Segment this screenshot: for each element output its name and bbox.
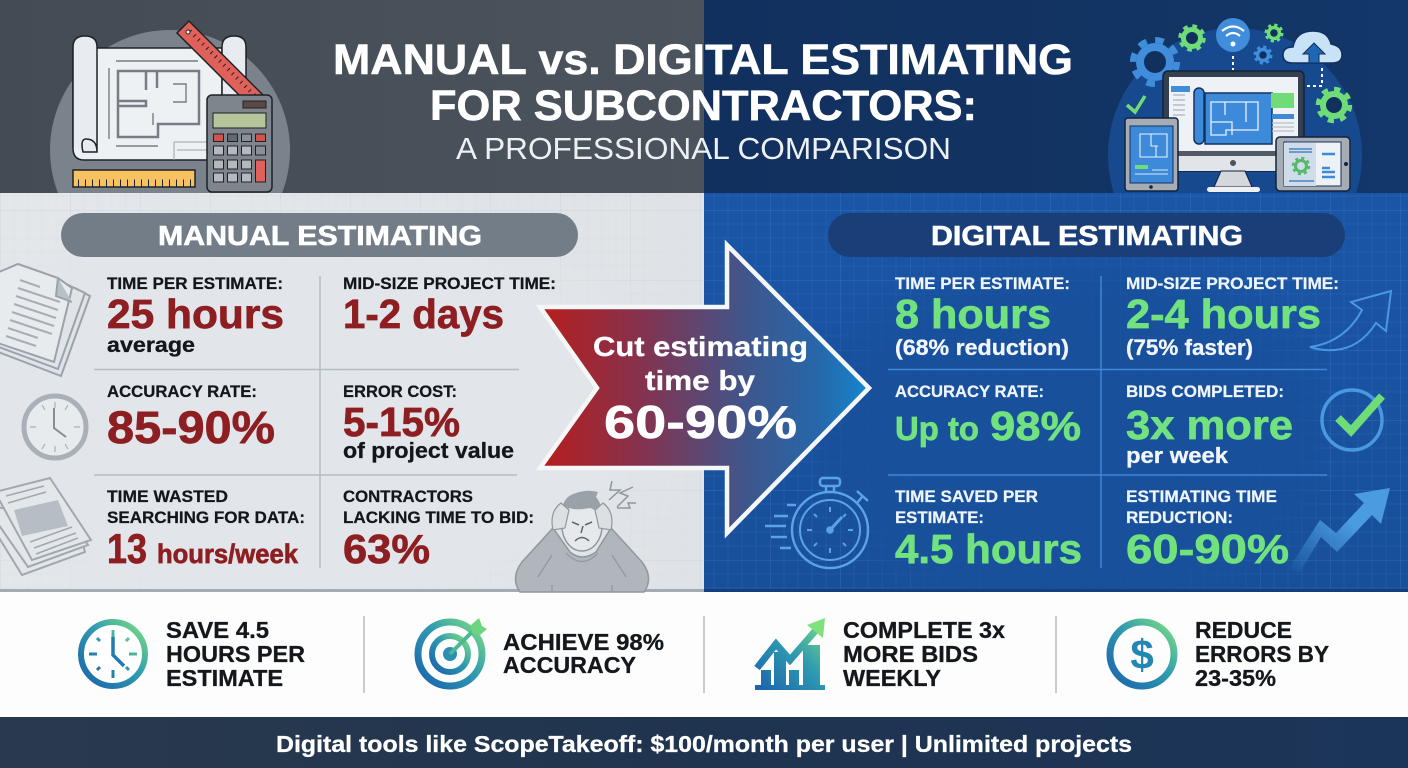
stat: time wasted searching (manual): TIME WASTED	[107, 487, 228, 506]
stat: accuracy rate (manual)	[107, 382, 275, 453]
benefit: save 4.5 hours: SAVE 4.5	[166, 617, 269, 643]
icon: blueprint, ruler and calculator	[50, 20, 290, 193]
central arrow callout	[540, 245, 869, 533]
icon: digital devices with gears and cloud	[1108, 18, 1362, 193]
stat: time wasted searching (manual): 13	[107, 525, 147, 572]
digital grid dividers	[888, 276, 1327, 568]
title: A PROFESSIONAL COMPARISON	[456, 131, 951, 166]
stat: accuracy rate (manual): ACCURACY RATE:	[107, 382, 257, 401]
stat: error cost (manual): ERROR COST:	[343, 382, 457, 401]
benefit: complete 3x more bids	[755, 617, 1005, 691]
central arrow callout: Cut estimating	[593, 331, 808, 362]
stat: estimating time reduction (digital): 60-90%	[1126, 526, 1289, 572]
stat: accuracy rate (digital)	[895, 382, 1081, 449]
benefits strip background	[0, 592, 1408, 717]
benefit: complete 3x more bids: COMPLETE 3x	[843, 617, 1005, 643]
icon: stacked paper	[0, 264, 90, 376]
benefit: save 4.5 hours	[81, 617, 305, 691]
title: MANUAL vs. DIGITAL ESTIMATING	[333, 36, 1073, 84]
stat: error cost (manual): 5-15%	[343, 399, 460, 445]
icon: check in circle	[1322, 390, 1382, 450]
stat: contractors lacking time (manual): LACKING TIME TO BID:	[343, 508, 534, 527]
stat: mid-size project time (digital): MID-SIZE PROJECT TIME:	[1126, 274, 1339, 293]
central arrow callout: 60-90%	[604, 396, 797, 448]
benefit: reduce errors: 23-35%	[1195, 665, 1276, 691]
benefit: achieve 98% accuracy: ACHIEVE 98%	[503, 629, 664, 655]
stat: mid-size project time (digital): (75% faster)	[1126, 335, 1253, 360]
benefit: reduce errors	[1110, 617, 1329, 691]
icon: target	[418, 618, 487, 686]
stat: bids completed (digital): 3x more	[1126, 402, 1293, 448]
stat: error cost (manual): of project value	[343, 438, 514, 463]
stat: time per estimate (manual): TIME PER ESTIMATE:	[107, 274, 283, 293]
benefit: complete 3x more bids: MORE BIDS	[843, 641, 978, 667]
stat: accuracy rate (digital): 98%	[990, 403, 1081, 449]
heading: manual estimating	[61, 213, 578, 257]
icon: clock	[81, 622, 145, 686]
stat: bids completed (digital)	[1126, 382, 1293, 468]
panel: digital estimating background	[704, 193, 1408, 592]
stat: time per estimate (digital)	[895, 274, 1070, 360]
stat: error cost (manual)	[343, 382, 514, 463]
stat: mid-size project time (manual): MID-SIZE PROJECT TIME:	[343, 274, 556, 293]
stat: bids completed (digital): per week	[1126, 443, 1229, 468]
stat: time per estimate (digital): (68% reduction)	[895, 335, 1069, 360]
benefit: save 4.5 hours: HOURS PER	[166, 641, 305, 667]
icon: stacked documents	[0, 478, 91, 575]
footer bar: Digital tools like ScopeTakeoff: $100/month per user | Unlimited projects	[276, 731, 1132, 757]
stat: contractors lacking time (manual): CONTRACTORS	[343, 487, 473, 506]
benefit: reduce errors: ERRORS BY	[1195, 641, 1329, 667]
icon: dollar ring	[1110, 622, 1174, 686]
icon: trending arrow	[1288, 488, 1390, 572]
icon: wall clock	[24, 396, 86, 458]
stat: bids completed (digital): BIDS COMPLETED:	[1126, 382, 1284, 401]
icon: stressed man	[515, 481, 649, 592]
stat: time saved per estimate (digital)	[895, 487, 1082, 572]
benefit: achieve 98% accuracy: ACCURACY	[503, 652, 636, 678]
central arrow callout: time by	[645, 365, 755, 396]
stat: mid-size project time (manual)	[343, 274, 556, 337]
stat: estimating time reduction (digital): REDUCTION:	[1126, 508, 1233, 527]
title: FOR SUBCONTRACTORS:	[430, 82, 977, 130]
stat: time per estimate (manual): 25 hours	[107, 291, 284, 337]
stat: time wasted searching (manual): hours/week	[157, 539, 299, 569]
stat: accuracy rate (manual): 85-90%	[107, 402, 275, 453]
icon: rising outline arrow	[1310, 291, 1391, 350]
heading: manual estimating: MANUAL ESTIMATING	[158, 220, 482, 251]
icon: stopwatch	[765, 478, 868, 568]
stat: time per estimate (digital): TIME PER ESTIMATE:	[895, 274, 1070, 293]
stat: mid-size project time (digital): 2-4 hours	[1126, 291, 1321, 337]
stat: mid-size project time (manual): 1-2 days	[343, 291, 504, 337]
footer bar	[0, 717, 1408, 768]
stat: mid-size project time (digital)	[1126, 274, 1339, 360]
stat: estimating time reduction (digital): ESTIMATING TIME	[1126, 487, 1277, 506]
title	[333, 36, 1073, 166]
header background	[0, 0, 1408, 193]
stat: contractors lacking time (manual): 63%	[343, 526, 430, 572]
stat: accuracy rate (digital): Up to	[895, 410, 979, 447]
stat: time per estimate (manual): average	[107, 334, 195, 357]
benefit dividers	[364, 616, 1056, 693]
stat: time wasted searching (manual): SEARCHING FOR DATA:	[107, 508, 305, 527]
benefit: reduce errors: REDUCE	[1195, 617, 1292, 643]
stat: time saved per estimate (digital): 4.5 hours	[895, 526, 1082, 572]
icon: rising bar chart	[755, 618, 825, 690]
heading: digital estimating: DIGITAL ESTIMATING	[931, 220, 1243, 251]
benefit: save 4.5 hours: ESTIMATE	[166, 665, 283, 691]
heading: digital estimating	[828, 213, 1345, 257]
stat: time wasted searching (manual)	[107, 487, 305, 572]
panel: manual estimating background	[0, 193, 704, 592]
stat: time per estimate (digital): 8 hours	[895, 291, 1051, 337]
stat: contractors lacking time (manual)	[343, 487, 534, 572]
manual grid dividers	[94, 276, 519, 568]
stat: time per estimate (manual)	[107, 274, 284, 357]
stat: estimating time reduction (digital)	[1126, 487, 1289, 572]
icon: dollar ring: $	[1130, 631, 1154, 678]
stat: time saved per estimate (digital): TIME SAVED PER	[895, 487, 1038, 506]
stat: accuracy rate (digital): ACCURACY RATE:	[895, 382, 1044, 401]
benefit: complete 3x more bids: WEEKLY	[843, 665, 941, 691]
benefit: achieve 98% accuracy	[418, 618, 664, 686]
stat: time saved per estimate (digital): ESTIMATE:	[895, 508, 984, 527]
